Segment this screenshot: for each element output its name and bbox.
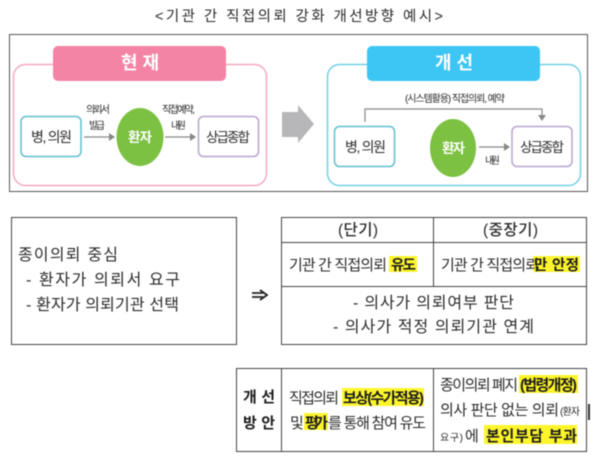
panel: paper referral: - 환자가 의뢰서 요구 [26, 271, 180, 289]
arrow: current to improved [282, 105, 314, 143]
panel: current [14, 46, 266, 186]
arrow: system direct referral: (시스템활용) 직접의뢰, 예약 [405, 92, 505, 105]
box: tertiary hospital: 상급종합 [520, 140, 564, 155]
arrow: visit: 내원 [485, 155, 500, 167]
cell: mid-long term goal: 만 안정 [534, 257, 579, 274]
panel: comparison diagram [10, 34, 588, 192]
cell: abolish paper referral [440, 375, 580, 445]
box: clinic [334, 126, 394, 166]
arrow: system direct referral [365, 92, 542, 122]
title: <기관 간 직접의뢰 강화 개선방향 예시> [155, 8, 443, 25]
box: clinic [21, 116, 81, 156]
cell: short term goal: 기관 간 직접의뢰 [289, 257, 387, 274]
box: tertiary hospital [512, 126, 572, 166]
box: clinic: 병, 의원 [31, 129, 72, 145]
panel: improved [328, 46, 580, 186]
icon: patient: 환자 [128, 130, 153, 145]
arrow: referral issued [84, 104, 114, 137]
cell: abolish paper referral: 종이의뢰 폐지 [440, 377, 518, 394]
box: tertiary hospital: 상급종합 [206, 130, 250, 145]
cell: abolish paper referral: 요구) [440, 433, 463, 444]
arrow: referral issued: 의뢰서 [86, 104, 110, 116]
cell: abolish paper referral: (법령개정) [520, 377, 577, 394]
table: short and mid-long term [282, 218, 586, 344]
header: short term: (단기) [338, 221, 378, 239]
arrow: visit [479, 147, 509, 167]
arrow: direct booking [162, 104, 195, 137]
arrow: referral issued: 발급 [89, 120, 105, 132]
cell: compensation: 보상(수가적용) [343, 390, 424, 407]
arrow: double [252, 290, 267, 300]
panel: paper referral: 종이의뢰 중심 [18, 246, 118, 264]
cell: mid-long term goal: 기관 간 직접의뢰 [441, 257, 539, 274]
box: clinic: 병, 의원 [345, 139, 386, 155]
icon: patient: 환자 [442, 141, 466, 156]
cell: compensation: 직접의뢰 [289, 390, 339, 407]
cell: short term goal: 유도 [391, 258, 416, 274]
heading: current [53, 46, 226, 81]
table: improvement plan [236, 368, 586, 452]
row label: 개 선 [243, 389, 275, 406]
box: tertiary hospital [198, 116, 258, 156]
cell: compensation: 및 [290, 415, 304, 432]
arrow: direct booking: 직접예약, [162, 104, 195, 116]
cell: abolish paper referral: 의사 판단 없는 의뢰 [440, 402, 559, 419]
icon: patient [430, 119, 476, 177]
cell: abolish paper referral: 에 [465, 428, 479, 445]
header: mid-long term: (중장기) [483, 221, 538, 239]
cell: abolish paper referral: (환자 [560, 406, 580, 418]
icon: patient [116, 108, 164, 166]
cell: doctor decision: - 의사가 의뢰여부 판단 [353, 294, 514, 312]
cell: compensation: 를 통해 참여 유도 [328, 415, 426, 432]
cell: abolish paper referral: 본인부담 부과 [486, 428, 577, 445]
cell: compensation [289, 388, 426, 432]
heading: current: 현 재 [121, 53, 159, 73]
cell: doctor decision: - 의사가 적정 의뢰기관 연계 [333, 318, 534, 336]
panel: paper referral: - 환자가 의뢰기관 선택 [26, 296, 179, 314]
panel: paper referral [12, 218, 236, 344]
heading: improved [367, 46, 540, 81]
arrow: direct booking: 내원 [171, 120, 186, 132]
cell: doctor decision [333, 294, 534, 336]
row label [243, 389, 275, 432]
cell: mid-long term goal [441, 256, 580, 274]
heading: improved: 개 선 [435, 53, 473, 73]
row label: 방안 [243, 415, 275, 432]
cell: compensation: 평가 [305, 415, 328, 432]
